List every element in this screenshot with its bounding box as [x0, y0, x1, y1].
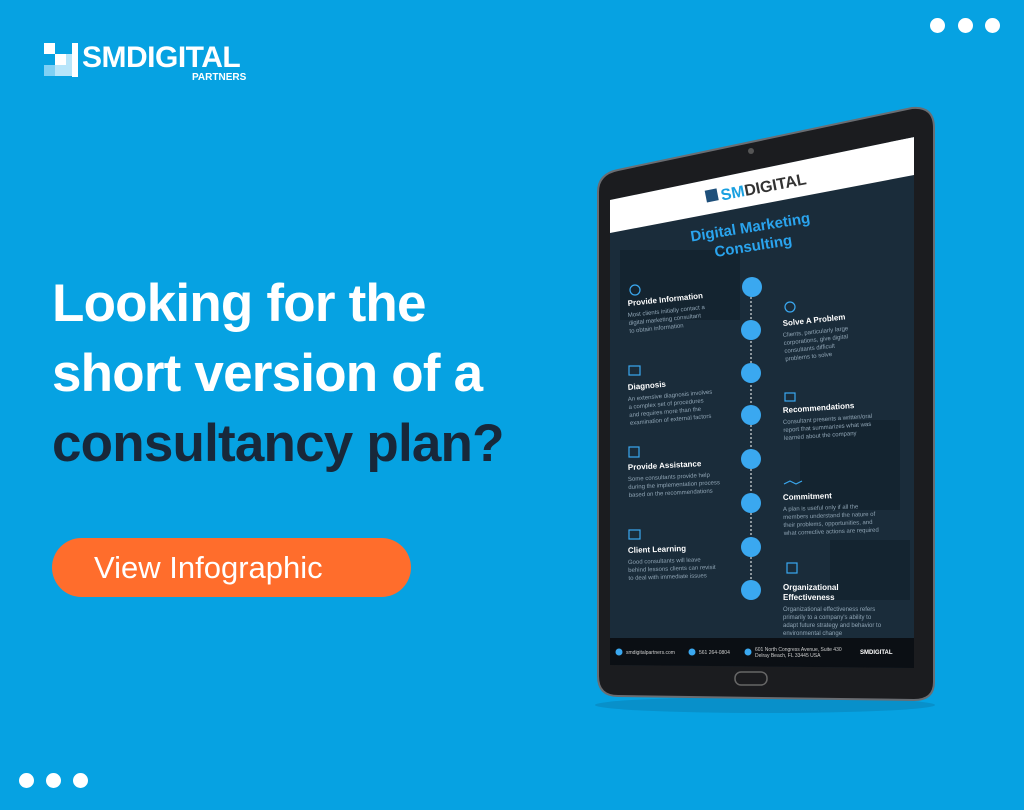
- step texts: Recommendations: [783, 401, 855, 415]
- step texts: Provide Information: [627, 291, 703, 308]
- screen: what corrective actions are required: [783, 528, 879, 537]
- button: View Infographic: [52, 538, 411, 597]
- footer: 601 North Congress Avenue, Suite 430: [755, 647, 842, 653]
- footer: 561 264-0804: [699, 650, 730, 656]
- screen: based on the recommendations: [629, 489, 713, 499]
- screen title: [690, 214, 810, 256]
- tablet: [595, 106, 935, 713]
- screen: Clients, particularly large: [783, 326, 849, 339]
- screen: problems to solve: [785, 352, 833, 363]
- screen: digital marketing consultant: [628, 313, 702, 327]
- dots top right: [930, 18, 1000, 33]
- screen: corporations, give digital: [783, 334, 848, 347]
- step texts: Provide Assistance: [628, 459, 702, 472]
- screen: Some consultants provide help: [628, 473, 711, 483]
- screen: Consultant presents a written/oral: [783, 414, 872, 426]
- button: View Infographic: View Infographic: [94, 550, 323, 585]
- screen: environmental change: [783, 631, 843, 637]
- icons: [629, 285, 802, 573]
- screen: to deal with immediate issues: [628, 573, 707, 582]
- dots bottom left: [19, 773, 88, 788]
- step texts: Commitment: [783, 491, 832, 502]
- screen: Organizational effectiveness refers: [783, 607, 875, 613]
- footer: Delray Beach, FL 33445 USA: [755, 653, 821, 659]
- headline: short version of a: [52, 344, 482, 403]
- screen: to obtain information: [629, 323, 684, 335]
- logo: [44, 41, 246, 83]
- screen: A plan is useful only if all the: [783, 504, 859, 513]
- logo: SMDIGITAL: [82, 41, 240, 74]
- screen: learned about the company: [784, 431, 857, 442]
- screen: examination of external factors: [630, 414, 712, 427]
- screen: Good consultants will leave: [628, 557, 701, 566]
- footer: smdigitalpartners.com: [626, 650, 675, 656]
- headline: consultancy plan?: [52, 414, 504, 473]
- screen: adapt future strategy and behavior to: [783, 623, 882, 629]
- screen title: Digital Marketing: [689, 210, 811, 245]
- screen: [600, 130, 920, 675]
- step texts: Diagnosis: [627, 380, 667, 392]
- screen: their problems, opportunities, and: [783, 520, 873, 529]
- logo: PARTNERS: [192, 72, 246, 83]
- step texts: [627, 291, 855, 602]
- step texts: Organizational: [783, 583, 839, 592]
- screen title: Consulting: [713, 232, 793, 261]
- screen: behind lessons clients can revisit: [628, 565, 716, 574]
- step texts: Effectiveness: [783, 593, 835, 602]
- screen: report that summarizes what was: [783, 422, 872, 434]
- step texts: Solve A Problem: [782, 312, 846, 328]
- screen: An extensive diagnosis involves: [628, 390, 713, 403]
- screen: members understand the nature of: [783, 512, 876, 521]
- step texts: Client Learning: [628, 544, 686, 555]
- tablet body: [595, 108, 935, 713]
- headline: [52, 274, 504, 473]
- headline: Looking for the: [52, 274, 426, 333]
- screen: primarily to a company's ability to: [783, 615, 872, 621]
- footer: SMDIGITAL: [860, 650, 893, 656]
- timeline: [741, 277, 762, 600]
- footer: [616, 647, 893, 659]
- screen logo: SMDIGITAL: [719, 171, 808, 205]
- screen: Most clients initially contact a: [628, 305, 706, 319]
- screen: a complex set of procedures: [628, 398, 704, 411]
- screen: and requires more than the: [629, 407, 702, 419]
- screen: during the implementation process: [628, 480, 720, 491]
- screen: consultants difficult: [784, 344, 836, 355]
